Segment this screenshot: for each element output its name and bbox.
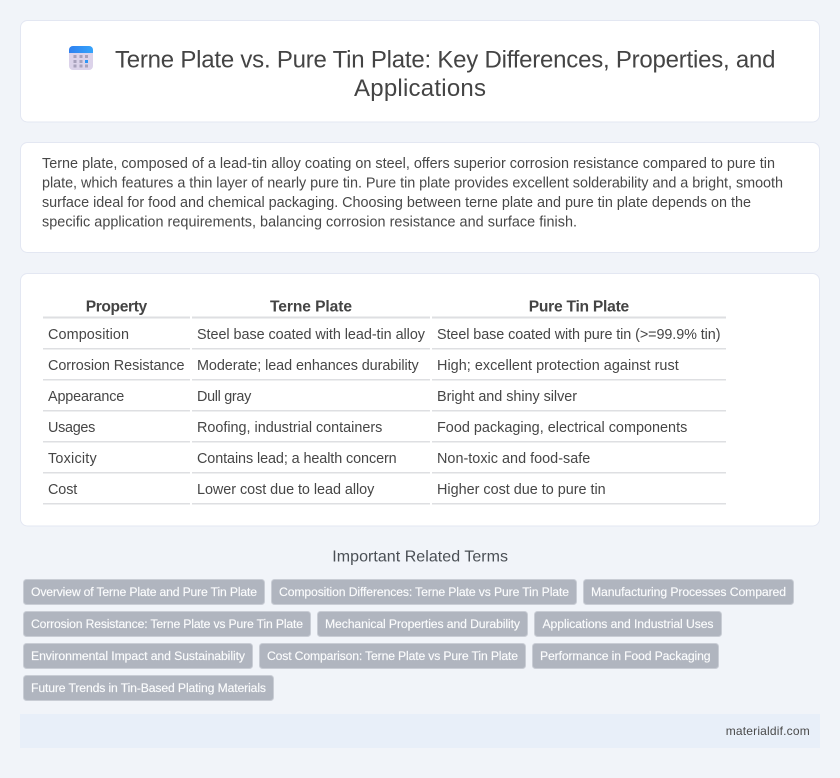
text block: summary: specific application requirements, balancing corrosion resistance and surface finish. (42, 214, 577, 230)
row: cost (43, 482, 726, 504)
row: usages: Roofing, industrial containers (197, 420, 382, 436)
row: toxicity (43, 451, 726, 474)
tag: overview (24, 580, 264, 604)
tag: cost comparison: Cost Comparison: Terne Plate vs Pure Tin Plate (267, 649, 518, 663)
table header row (43, 299, 726, 318)
panel: comparison table (20, 274, 820, 526)
row: usages: Food packaging, electrical components (437, 420, 687, 436)
row: appearance: Appearance (48, 389, 124, 405)
footer source: materialdif.com (726, 724, 810, 738)
row: appearance: Dull gray (197, 389, 252, 405)
tag: food packaging (532, 644, 718, 668)
title: Applications (354, 75, 486, 102)
row: corrosion resistance (43, 358, 726, 380)
row: corrosion resistance: Moderate; lead enhances durability (197, 358, 419, 374)
row: composition: Composition (48, 327, 129, 343)
tag: food packaging: Performance in Food Packaging (540, 649, 710, 663)
row: composition: Steel base coated with lead-tin alloy (197, 327, 426, 343)
tag: composition differences (272, 580, 576, 604)
row: toxicity: Contains lead; a health concern (197, 451, 397, 467)
footer bar (20, 714, 820, 748)
row: cost: Lower cost due to lead alloy (197, 482, 375, 498)
tag: future trends (24, 676, 274, 700)
text block: summary (42, 156, 783, 230)
table header row: Property (86, 299, 148, 316)
tag: future trends: Future Trends in Tin-Based Plating Materials (31, 681, 266, 695)
text block: summary: surface ideal for food and chemical packaging. Choosing between terne plate and pure tin plate depends on the (42, 195, 751, 211)
row: appearance (43, 389, 726, 412)
panel: summary paragraph (20, 142, 820, 252)
row: appearance: Bright and shiny silver (437, 389, 577, 405)
tag: environmental impact: Environmental Impact and Sustainability (31, 649, 246, 663)
title (115, 46, 776, 102)
row: usages: Usages (48, 420, 95, 436)
row: corrosion resistance: Corrosion Resistance (48, 358, 184, 374)
table header row: Pure Tin Plate (529, 299, 630, 316)
icon: calendar grid (69, 46, 93, 70)
tag list: related terms (24, 580, 794, 700)
title: Terne Plate vs. Pure Tin Plate: Key Differences, Properties, and (115, 46, 776, 74)
row: corrosion resistance: High; excellent protection against rust (437, 358, 679, 374)
row: composition: Steel base coated with pure tin (>=99.9% tin) (437, 327, 720, 343)
text block: summary: Terne plate, composed of a lead-tin alloy coating on steel, offers superior corrosion resistance compared to pure tin (42, 156, 775, 172)
panel: title header (20, 20, 820, 122)
tag: manufacturing processes (584, 580, 794, 604)
row: cost: Higher cost due to pure tin (437, 482, 606, 498)
tag: applications: Applications and Industrial Uses (542, 617, 714, 631)
row: usages (43, 420, 726, 442)
row: cost: Cost (48, 482, 77, 498)
tag: cost comparison (260, 644, 526, 668)
table header row: Terne Plate (270, 299, 352, 316)
tag: mechanical properties (318, 612, 528, 636)
row: toxicity: Toxicity (48, 451, 97, 467)
tag: mechanical properties: Mechanical Properties and Durability (325, 617, 521, 631)
tag: corrosion resistance: Corrosion Resistance: Terne Plate vs Pure Tin Plate (31, 617, 303, 631)
tag: corrosion resistance (24, 612, 310, 636)
tag: manufacturing processes: Manufacturing Processes Compared (591, 585, 786, 599)
tag: overview: Overview of Terne Plate and Pure Tin Plate (31, 585, 257, 599)
tag: environmental impact (24, 644, 252, 668)
row: toxicity: Non-toxic and food-safe (437, 451, 590, 467)
row: composition (43, 327, 726, 350)
tag: applications (534, 612, 722, 636)
heading: important related terms: Important Related Terms (332, 549, 508, 566)
tag: composition differences: Composition Differences: Terne Plate vs Pure Tin Plate (279, 585, 569, 599)
text block: summary: plate, which features a thin layer of nearly pure tin. Pure tin plate provides excellent solderability and a bright, smooth (42, 176, 783, 192)
